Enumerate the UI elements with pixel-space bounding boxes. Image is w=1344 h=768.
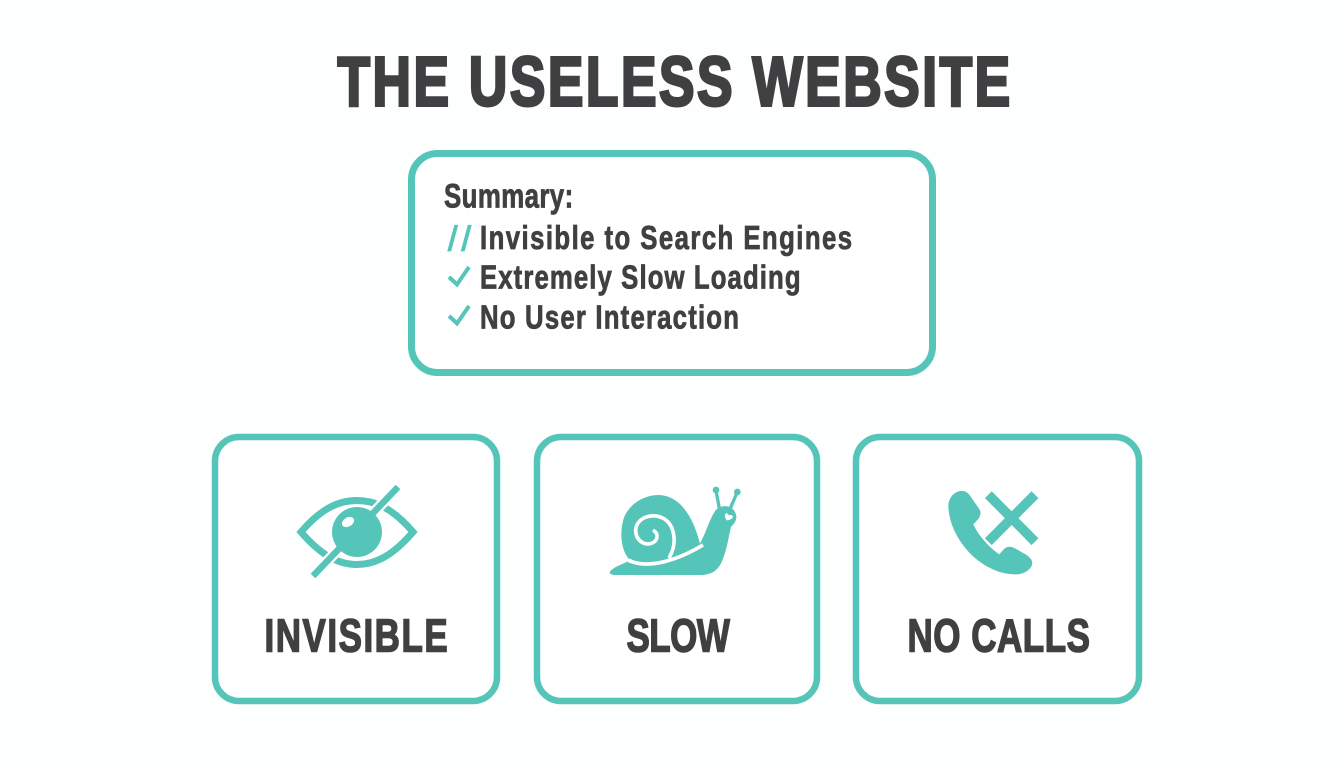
card label: NO CALLS	[908, 610, 1090, 662]
panel: summary	[412, 154, 932, 372]
summary heading: Summary:	[444, 178, 573, 215]
card label: SLOW	[626, 610, 730, 662]
list item: slow: Extremely Slow Loading	[480, 260, 801, 296]
icon: check mark 2	[449, 306, 469, 324]
card label: INVISIBLE	[264, 610, 448, 662]
icon: double slash bullet: //	[448, 220, 472, 258]
title: THE USELESS WEBSITE	[338, 44, 1010, 121]
card frame	[856, 437, 1139, 701]
summary box	[412, 154, 932, 372]
card frame	[215, 437, 497, 701]
icon: phone with cross	[948, 491, 1035, 574]
icon: check mark 1	[449, 267, 469, 284]
panel: no calls	[856, 437, 1139, 701]
icon: crossed-out eye	[301, 487, 413, 576]
icon: snail	[610, 487, 741, 575]
panel: invisible	[215, 437, 497, 701]
list item: invisible: Invisible to Search Engines	[480, 220, 852, 257]
list item: no interaction: No User Interaction	[480, 300, 739, 336]
card frame	[537, 437, 817, 701]
panel: slow	[537, 437, 817, 701]
